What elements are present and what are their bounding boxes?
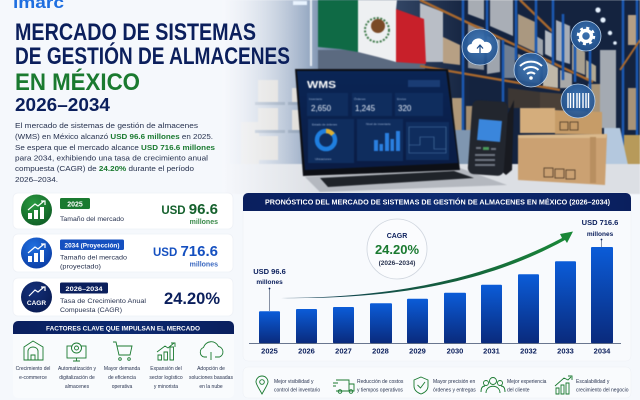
label: 2025 value xyxy=(253,267,286,311)
benefit text: costs xyxy=(357,379,404,394)
laptop lid xyxy=(295,69,460,176)
benefit text: accuracy: órdenes y entregas xyxy=(433,388,476,394)
card: CAGR: 2026–2034 xyxy=(66,286,103,293)
card: projected market size 2034: Tamaño del mercado xyxy=(60,254,127,262)
icon: automation monitor xyxy=(67,343,86,361)
panel: forecast chart xyxy=(243,193,631,361)
benefit text: customer experience: del cliente xyxy=(507,388,530,394)
table xyxy=(225,164,640,194)
label: 2025 value: millones xyxy=(256,279,283,286)
factor labels: Automatización y xyxy=(58,366,97,372)
CAGR badge: (2026–2034) xyxy=(379,260,415,267)
donut chart xyxy=(317,131,335,149)
aisle floor xyxy=(604,128,628,165)
level 2 boxes xyxy=(468,22,484,70)
icon: cart xyxy=(113,342,132,360)
year labels: 2034 xyxy=(594,346,611,356)
label: 2034 value xyxy=(582,218,618,247)
laptop: Ubicaciones xyxy=(315,157,332,161)
card: market size 2025: 2025 xyxy=(67,202,83,208)
icon: location pin xyxy=(256,376,268,394)
year labels xyxy=(261,346,611,356)
icon: warehouse xyxy=(24,341,43,360)
icon: wifi xyxy=(514,53,548,87)
panel: benefits strip xyxy=(243,367,631,398)
card: market size 2025: millones xyxy=(190,219,218,226)
laptop: Estado de órdenes xyxy=(312,122,338,126)
factor labels: Expansión del xyxy=(150,366,182,372)
benefit text: customer experience: Mejor experiencia xyxy=(507,379,547,385)
title: 2026–2034 xyxy=(15,94,111,115)
right rack xyxy=(628,15,636,45)
icon: barcode xyxy=(561,84,595,118)
CAGR badge: 24.20% xyxy=(375,242,419,257)
bars xyxy=(259,247,613,343)
handheld scanner xyxy=(467,100,514,176)
year labels: 2032 xyxy=(520,346,537,356)
year labels: 2026 xyxy=(298,346,315,356)
card: market size 2025: USD 96.6 xyxy=(161,201,218,218)
left fade over photo xyxy=(222,0,317,195)
factor labels: soluciones basadas xyxy=(189,375,233,381)
year labels: 2031 xyxy=(483,346,500,356)
card: projected market size 2034: 2034 (Proyección) xyxy=(64,242,120,250)
title: EN MÉXICO xyxy=(15,68,140,96)
benefit text: accuracy: Mayor precisión en xyxy=(433,379,475,385)
year labels: 2027 xyxy=(335,346,352,356)
card: market size 2025: Tamaño del mercado xyxy=(60,216,124,223)
icon: shield check xyxy=(414,377,428,394)
flag of Mexico xyxy=(318,0,426,64)
card: CAGR xyxy=(13,278,233,316)
mini line chart xyxy=(409,127,446,153)
shelf beams xyxy=(420,0,593,90)
chart header xyxy=(243,193,631,211)
laptop: Nivel de inventario xyxy=(366,122,391,126)
year labels: 2029 xyxy=(409,346,426,356)
title: DE GESTIÓN DE ALMACENES xyxy=(15,42,290,70)
benefit text: visibility: control del inventario xyxy=(274,388,320,394)
title: MERCADO DE SISTEMAS xyxy=(15,19,256,46)
benefit text: scalability xyxy=(576,379,629,394)
intro paragraph: (WMS) en México alcanzó USD 96.6 millones en 2025. xyxy=(15,132,213,141)
label: 2034 value: USD 716.6 xyxy=(582,218,618,227)
year labels: 2030 xyxy=(447,346,463,356)
benefit text: scalability: Escalabilidad y xyxy=(576,379,610,385)
laptop: Envíos xyxy=(397,97,407,101)
laptop: Órdenes xyxy=(354,96,366,101)
intro paragraph: 2026–2034. xyxy=(15,175,58,184)
year labels: 2025 xyxy=(261,346,278,356)
card: CAGR: Tasa de Crecimiento Anual xyxy=(60,298,147,305)
factor labels: almacenes xyxy=(65,384,90,390)
warehouse photo background xyxy=(225,0,640,194)
factor labels: Adopción de xyxy=(197,366,225,372)
card: CAGR: Compuesta (CAGR) xyxy=(60,307,122,314)
factor labels: de eficiencia xyxy=(108,375,136,381)
icon: truck xyxy=(333,380,354,393)
laptop base xyxy=(305,168,507,192)
intro paragraph xyxy=(15,121,215,184)
intro paragraph: El mercado de sistemas de gestión de almacenes xyxy=(15,121,198,130)
card: CAGR: 24.20% xyxy=(164,290,220,308)
card: CAGR: CAGR xyxy=(27,300,46,307)
factor labels: en la nube xyxy=(199,384,223,390)
factor labels: Crecimiento del xyxy=(16,366,50,372)
CAGR badge: CAGR xyxy=(387,233,407,240)
factor labels: digitalización de xyxy=(59,375,95,381)
WMS title: WMS xyxy=(307,80,336,91)
icon: people xyxy=(481,378,505,393)
dashboard figures: 1,245 xyxy=(355,104,376,113)
card: projected market size 2034: millones xyxy=(190,262,218,268)
dashboard figures xyxy=(311,104,412,113)
icon: cloud xyxy=(200,342,223,360)
ceiling lights xyxy=(293,1,617,45)
card: projected market size 2034 xyxy=(13,234,233,272)
icon: cloud upload xyxy=(462,29,498,65)
benefit text: accuracy xyxy=(433,379,476,394)
benefit text: costs: Reducción de costos xyxy=(357,379,404,385)
factor labels: e-commerce xyxy=(19,375,47,381)
flag pole xyxy=(310,0,312,66)
factor labels: operativa xyxy=(112,384,132,390)
intro paragraph: para 2034, exhibiendo una tasa de crecimiento anual xyxy=(15,154,208,162)
year labels: 2028 xyxy=(372,346,389,356)
panel: key factors xyxy=(13,321,234,398)
intro paragraph: Se espera que el mercado alcance USD 716.6 millones xyxy=(15,143,215,152)
label: 2025 value: USD 96.6 xyxy=(253,267,286,276)
benefit text: scalability: crecimiento del negocio xyxy=(576,388,629,394)
pale shelves left xyxy=(241,80,306,164)
factor labels: y minorista xyxy=(154,384,178,390)
label: 2034 value: millones xyxy=(587,231,614,238)
mini bars xyxy=(374,131,400,151)
laptop xyxy=(295,69,507,192)
level 1 boxes (top) xyxy=(420,3,443,62)
year labels: 2033 xyxy=(557,346,574,356)
benefit text: costs: y tiempos operativos xyxy=(357,388,403,394)
card: projected market size 2034: USD 716.6 xyxy=(153,243,218,260)
factor labels: Mayor demanda xyxy=(104,366,140,372)
dashboard figures: 2,650 xyxy=(311,104,332,113)
CAGR badge xyxy=(367,219,427,279)
factors header xyxy=(13,321,234,334)
rack uprights xyxy=(463,0,637,165)
factors header: FACTORES CLAVE QUE IMPULSAN EL MERCADO xyxy=(46,326,200,332)
axis line xyxy=(249,342,621,344)
shelf behind flag xyxy=(318,50,425,70)
benefit text: visibility: Mejor visibilidad y xyxy=(274,379,314,385)
icon: gear xyxy=(571,21,601,51)
factor labels xyxy=(16,366,233,390)
title xyxy=(15,19,290,115)
dashboard tiles xyxy=(307,93,449,163)
intro paragraph: compuesta (CAGR) de 24.20% durante el período xyxy=(15,164,194,173)
laptop: Inventario xyxy=(309,97,323,101)
growth arrow xyxy=(281,232,573,298)
factor labels: sector logístico xyxy=(149,375,183,381)
icon: growth chart xyxy=(157,343,175,360)
benefit text: visibility xyxy=(274,379,320,394)
dashboard figures: 320 xyxy=(398,104,412,113)
icon: scale chart xyxy=(555,376,572,394)
cardboard boxes xyxy=(518,108,607,185)
level 3 boxes xyxy=(452,98,462,130)
benefit text: customer experience xyxy=(507,379,547,394)
card: market size 2025 xyxy=(13,193,233,229)
card: projected market size 2034: (proyectado) xyxy=(60,264,101,270)
chart header: PRONÓSTICO DEL MERCADO DE SISTEMAS DE GESTIÓN DE ALMACENES EN MÉXICO (2026–2034) xyxy=(265,198,610,206)
